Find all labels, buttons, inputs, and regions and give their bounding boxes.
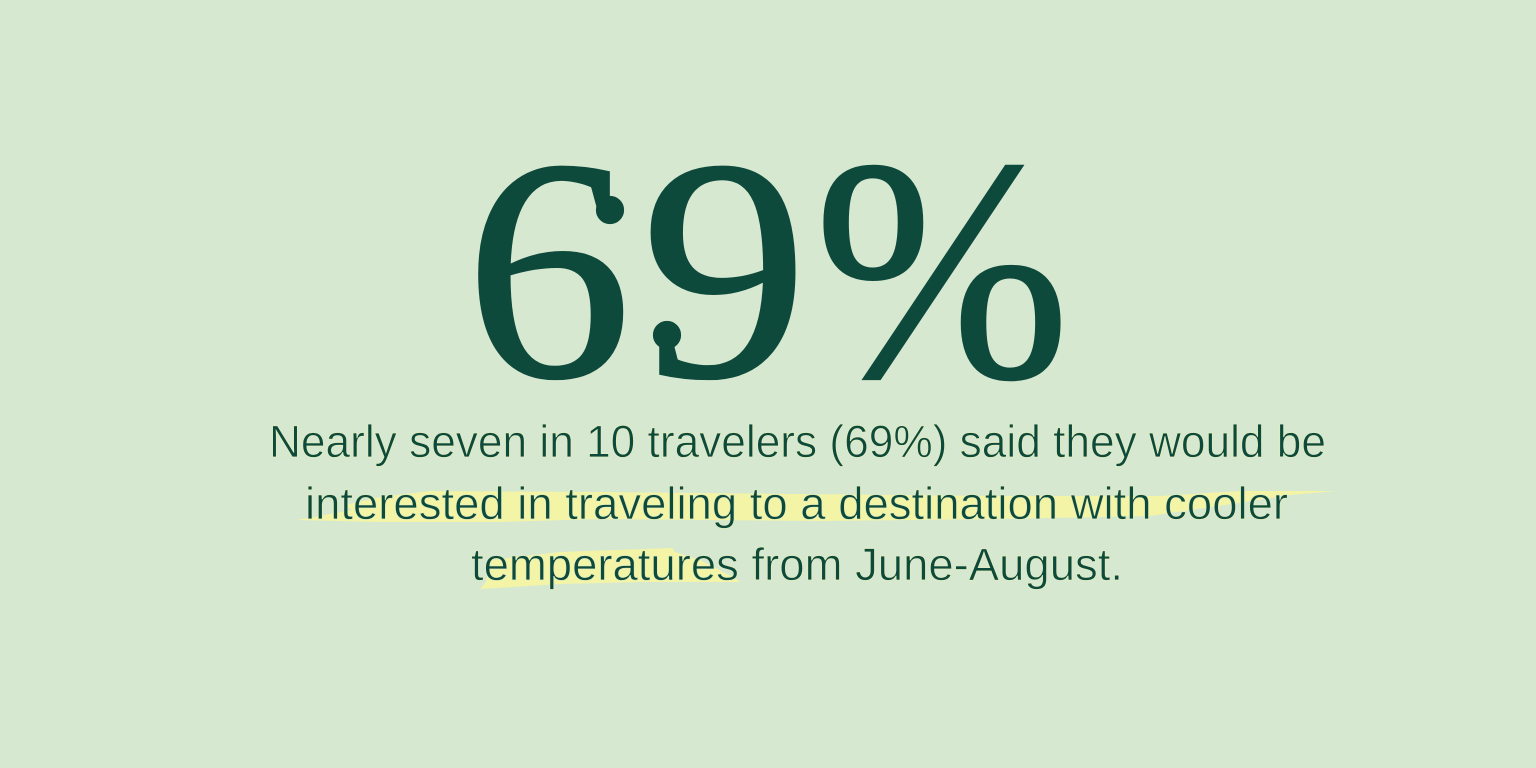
yellow highlighter stroke: line 3 [480, 548, 740, 589]
ball terminal of 6 [597, 197, 623, 223]
text line 3: temperatures from June-August. [471, 539, 1123, 590]
digit 6: 6 [465, 95, 632, 445]
yellow highlighter stroke: line 2 [297, 491, 1336, 522]
text line 1: Nearly seven in 10 travelers (69%) said they would be [269, 416, 1326, 467]
description text [269, 416, 1326, 590]
ball terminal of 9 [654, 322, 680, 348]
headline statistic: 69% [465, 95, 1070, 445]
percent sign: % [814, 95, 1070, 445]
text line 2: interested in traveling to a destination with cooler [305, 478, 1288, 529]
digit 9: 9 [641, 95, 808, 445]
